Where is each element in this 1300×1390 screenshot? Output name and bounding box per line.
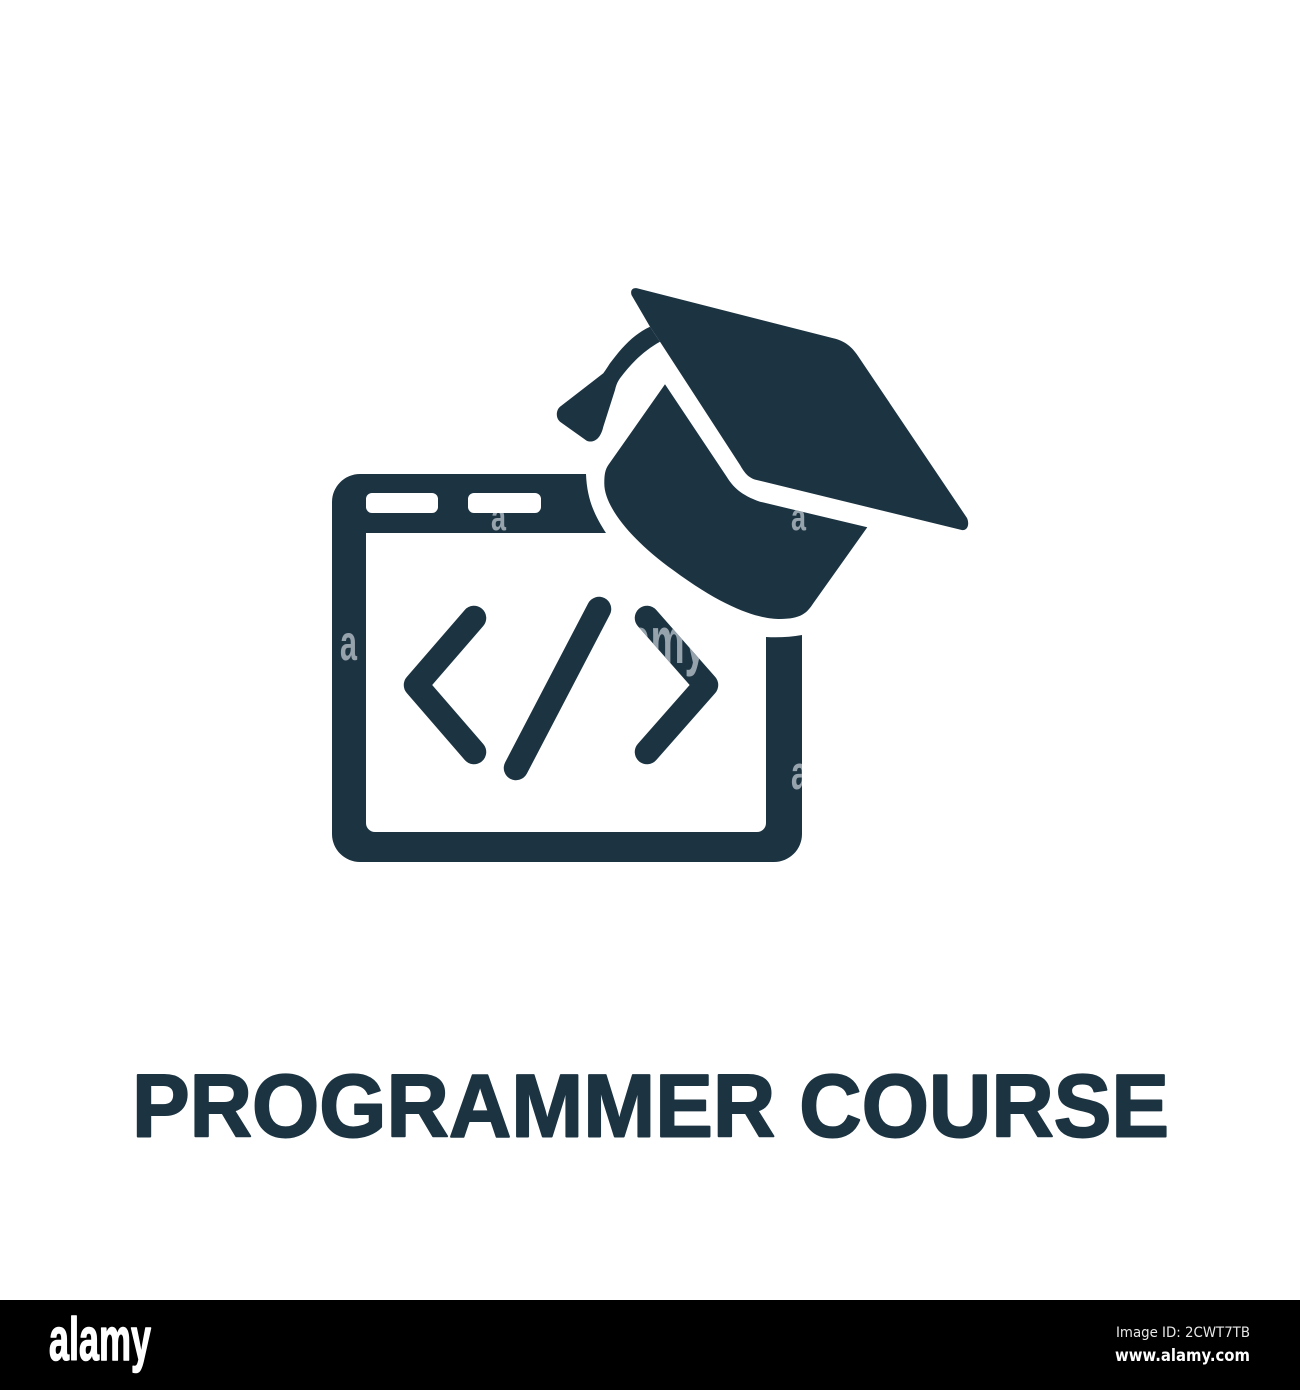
image id: Image ID: 2CWT7TB — [1116, 1325, 1250, 1341]
icon: graduation cap board — [631, 288, 968, 530]
footer bar — [0, 1300, 1300, 1390]
watermark letters over the icon: a — [791, 746, 809, 799]
watermark letters over the icon — [340, 497, 809, 799]
icon: code window with graduation cap — [332, 288, 968, 862]
website: www.alamy.com — [1115, 1346, 1250, 1366]
icon: graduation cap tassel — [557, 327, 660, 442]
infographic canvas — [0, 288, 1300, 1390]
watermark letters over the icon: alamy — [597, 603, 706, 677]
title: PROGRAMMER COURSE — [132, 1056, 1169, 1156]
footer logo: alamy — [49, 1306, 151, 1373]
watermark letters over the icon: a — [340, 615, 358, 671]
watermark letters over the icon: a — [791, 497, 807, 539]
watermark letters over the icon: a — [491, 497, 507, 539]
icon: browser window with code brackets and cap base — [332, 384, 867, 862]
